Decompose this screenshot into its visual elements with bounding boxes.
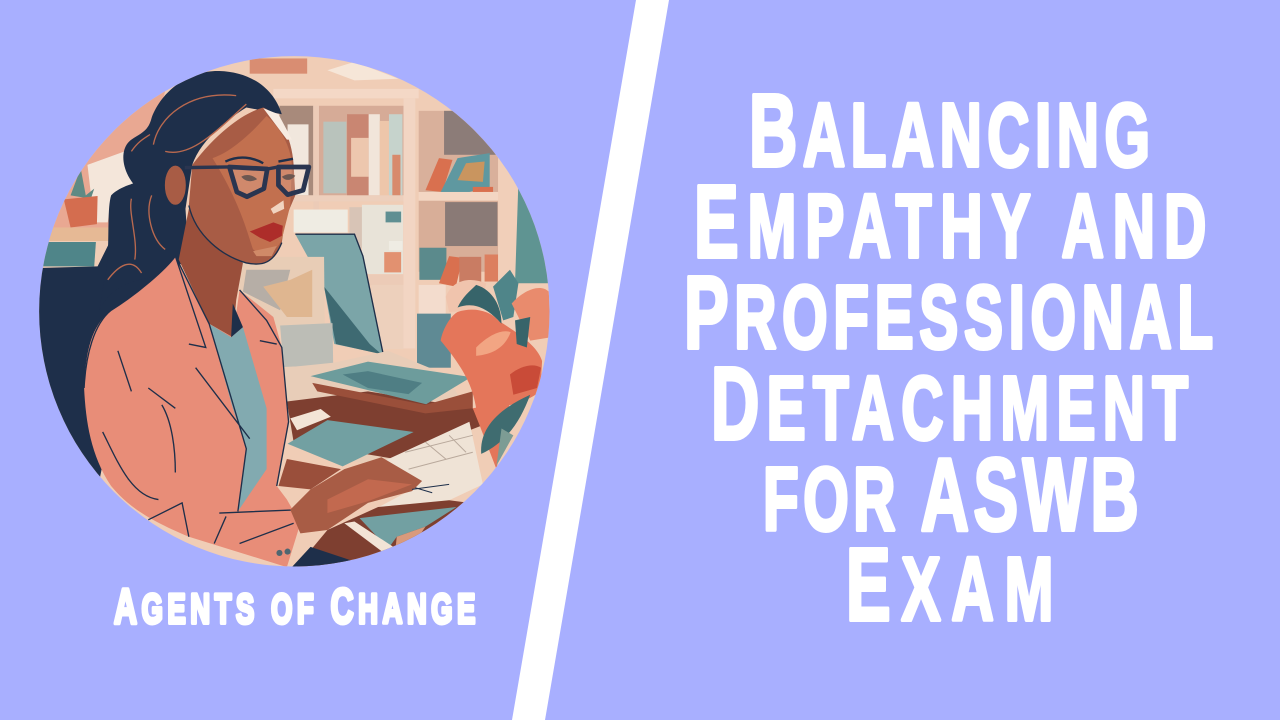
title: FOR ASWB bbox=[763, 438, 1139, 553]
woman's blazer bbox=[84, 256, 300, 567]
title: EXAM bbox=[846, 528, 1053, 643]
woman's glasses bbox=[185, 167, 309, 197]
title: DETACHMENT bbox=[711, 347, 1188, 462]
left wall and plant bbox=[40, 91, 165, 266]
title: PROFESSIONAL bbox=[684, 256, 1213, 371]
title bbox=[684, 74, 1213, 643]
title: EMPATHY AND bbox=[694, 165, 1206, 280]
dark background behind the woman bbox=[39, 244, 154, 477]
caption: Agents of Change: AGENTS OF CHANGE bbox=[114, 579, 475, 634]
woman's neck bbox=[179, 209, 243, 337]
circular illustration: woman at desk bbox=[39, 56, 550, 566]
computer monitor bbox=[240, 234, 383, 367]
flowers bbox=[441, 270, 551, 469]
woman's face bbox=[164, 107, 295, 264]
woman's shirt bbox=[209, 324, 267, 511]
woman's hand bbox=[278, 457, 449, 533]
bookshelf bbox=[278, 98, 557, 368]
title: BALANCING bbox=[749, 74, 1150, 189]
desk with laptop and papers bbox=[284, 351, 483, 571]
woman's hair bbox=[107, 71, 282, 280]
diagonal white stripe bbox=[512, 0, 669, 720]
